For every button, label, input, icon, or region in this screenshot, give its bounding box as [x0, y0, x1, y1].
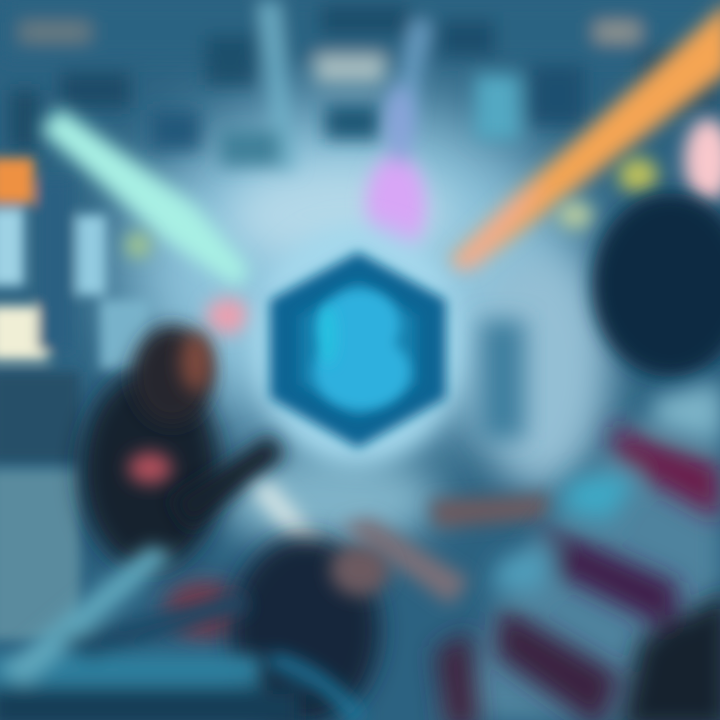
beam: orange light — [448, 0, 720, 270]
beam: purple light — [366, 85, 426, 255]
hexagon keyhole icon — [253, 225, 463, 465]
bottom centre hands and device — [230, 480, 550, 720]
keyhole — [314, 289, 410, 410]
left figure — [80, 325, 285, 636]
left side lights — [0, 158, 150, 640]
beam: cyan light — [40, 108, 250, 288]
right sleeve with stripes — [435, 380, 720, 720]
ceiling grid — [0, 0, 720, 171]
small glows — [126, 118, 720, 334]
middle background figure — [480, 320, 525, 440]
bottom left console — [0, 545, 360, 720]
right dark head — [592, 193, 720, 377]
